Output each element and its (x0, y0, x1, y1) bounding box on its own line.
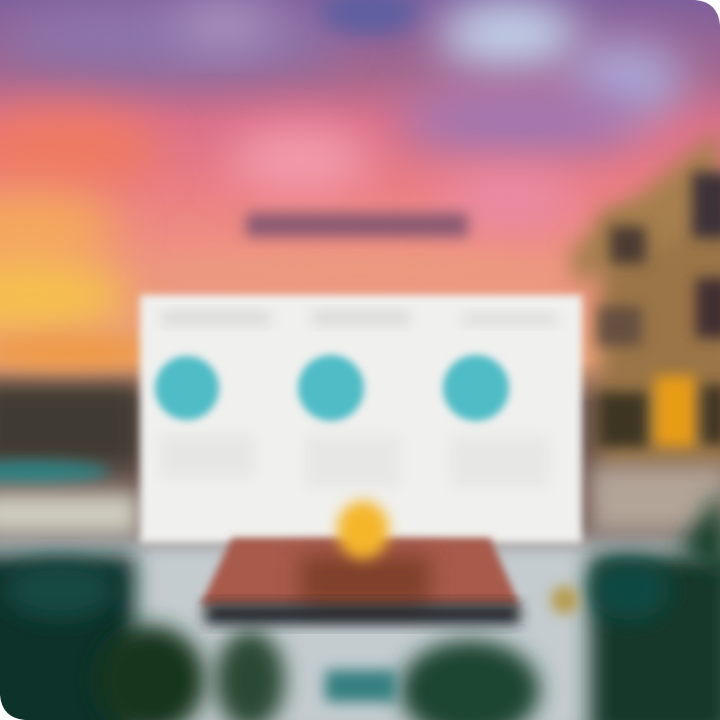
sun glow (337, 501, 389, 559)
icon circle 3 (443, 355, 509, 421)
icon circle 2 (298, 355, 364, 421)
roof (200, 538, 520, 624)
bottom garden and pool (0, 490, 720, 720)
text block 1 (160, 435, 255, 477)
column heading 1 (162, 311, 270, 325)
left tree line (0, 385, 140, 536)
column heading 3 (462, 313, 557, 325)
icon circle 1 (155, 356, 219, 420)
text block 2 (305, 435, 400, 487)
column heading 2 (312, 311, 410, 325)
panel: white content card (140, 295, 582, 543)
title (246, 213, 468, 237)
building on right (570, 130, 720, 533)
text block 3 (450, 435, 550, 487)
